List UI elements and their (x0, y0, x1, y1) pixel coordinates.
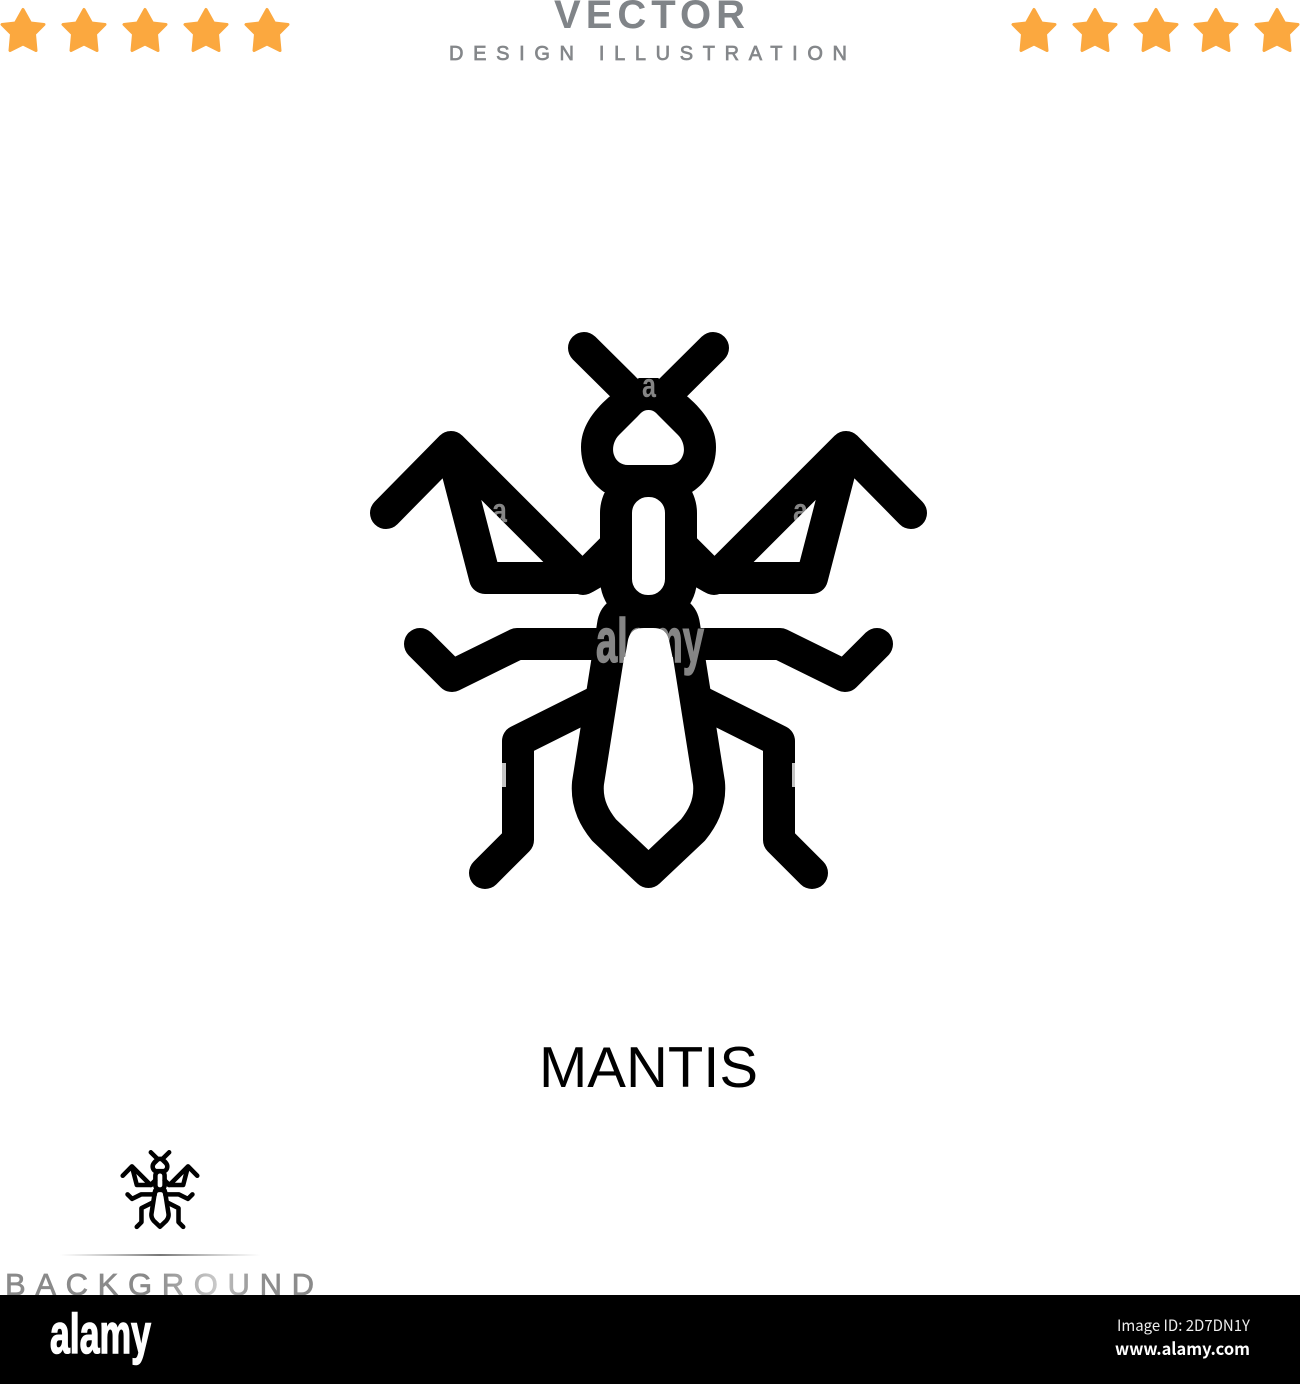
subheader: DESIGN ILLUSTRATION: DESIGN ILLUSTRATION (449, 43, 847, 65)
right raptorial leg (681, 447, 911, 579)
icon: mantis (large) (386, 348, 911, 873)
label: MANTIS: MANTIS (539, 1036, 758, 1100)
icon: mantis (small) (123, 1152, 197, 1227)
left middle leg (420, 644, 605, 676)
watermark: alamy over icon: alamy (596, 607, 704, 676)
divider line (60, 1254, 260, 1256)
watermark: alamy over icon: a (793, 492, 809, 530)
left hind leg (485, 700, 600, 873)
head outline (581, 378, 716, 492)
label: BACKGROUND: BACKGROUND (5, 1267, 314, 1302)
antennae (584, 348, 713, 412)
right hind leg (697, 700, 812, 873)
footer bar (0, 1295, 1300, 1384)
right middle leg (692, 644, 877, 676)
left raptorial leg (386, 447, 616, 579)
watermark: alamy over icon (492, 367, 809, 787)
watermark: alamy over icon: a (492, 492, 508, 530)
watermark: alamy over icon: a (642, 367, 657, 405)
image id: Image ID: 2D7DN1Y (1117, 1314, 1251, 1336)
left rating stars (2, 10, 288, 50)
website url: www.alamy.com (1115, 1335, 1250, 1360)
thorax (616, 481, 681, 611)
head opening (613, 410, 684, 465)
right rating stars (1013, 10, 1298, 50)
abdomen opening rounded top (612, 620, 685, 657)
logo: alamy: alamy (50, 1302, 151, 1365)
abdomen (588, 611, 709, 872)
